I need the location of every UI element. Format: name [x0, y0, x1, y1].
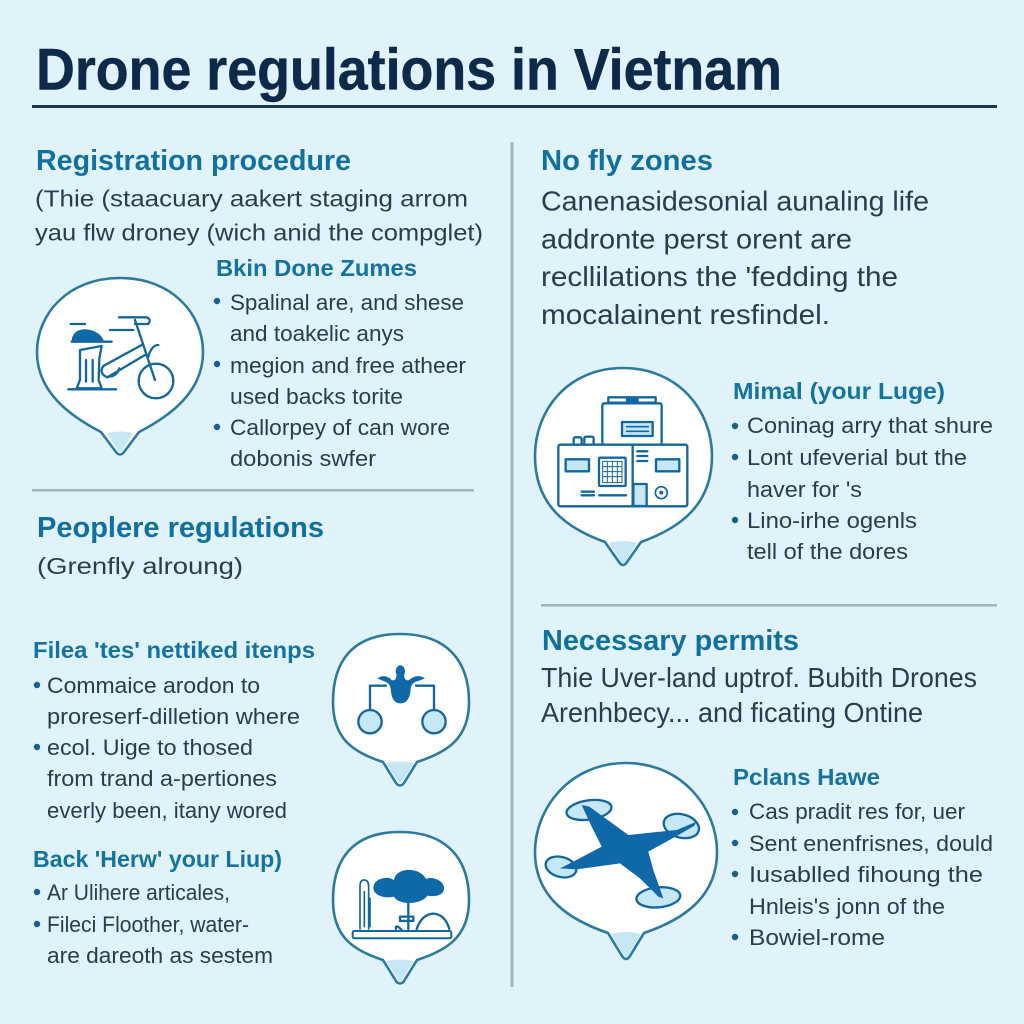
- bullet list: from trand a-pertiones: [47, 766, 277, 791]
- bullet list: megion and free atheer: [230, 353, 466, 378]
- bullet list: everly been, itany wored: [47, 798, 287, 823]
- panel: registration procedure: [35, 145, 483, 471]
- bullet list: [34, 880, 273, 968]
- intro text: recllilations the 'fedding the: [541, 261, 898, 292]
- icon: bicycle and pedestal bubble: [37, 278, 203, 454]
- bullet list: Hnleis's jonn of the: [749, 894, 945, 919]
- icon: balance figure bubble: [333, 634, 469, 786]
- bullet list: Sent enenfrisnes, dould: [749, 831, 993, 856]
- heading: no fly zones: No fly zones: [541, 145, 713, 177]
- intro text: mocalainent resfindel.: [541, 299, 830, 330]
- subheading: Pclans Hawe: Pclans Hawe: [733, 764, 880, 790]
- bullet list: proreserf-dilletion where: [47, 704, 300, 729]
- heading: registration procedure: Registration procedure: [36, 145, 351, 177]
- panel: peoplere regulations: [33, 512, 469, 984]
- bullet list: Commaice arodon to: [47, 673, 260, 698]
- icon: tree and tower bubble: [333, 832, 469, 984]
- bullet list: Lino-irhe ogenls: [747, 508, 917, 533]
- intro text: addronte perst orent are: [541, 224, 852, 254]
- bullet list: Fileci Floother, water-: [47, 912, 249, 937]
- intro text: [541, 662, 977, 728]
- bullet list: Ar Ulihere articales,: [47, 880, 230, 905]
- bullet list: used backs torite: [230, 384, 403, 409]
- intro text: Arenhbecy... and ficating Ontine: [541, 697, 923, 728]
- heading: necessary permits: Necessary permits: [542, 625, 799, 657]
- bullet list: ecol. Uige to thosed: [47, 735, 253, 760]
- intro text: Thie Uver-land uptrof. Bubith Drones: [541, 662, 977, 693]
- bullet list: and toakelic anys: [230, 321, 404, 346]
- subheading: Bkin Done Zumes: Bkin Done Zumes: [216, 255, 417, 281]
- bullet list: [214, 290, 466, 471]
- title: Drone regulations in Vietnam: [36, 38, 782, 102]
- bullet list: Bowiel-rome: [749, 925, 885, 950]
- subheading: Back Herw your Liup: Back 'Herw' your Liup): [33, 846, 282, 872]
- intro text: yau flw droney (wich anid the compglet): [35, 220, 483, 246]
- bullet list: Callorpey of can wore: [230, 415, 450, 440]
- bullet list: Iusablled fihoung the: [749, 862, 983, 887]
- bullet list: haver for 's: [747, 477, 862, 502]
- bullet list: [34, 673, 300, 823]
- intro text: (Grenfly alroung): [37, 553, 243, 579]
- bullet list: Spalinal are, and shese: [230, 290, 464, 315]
- panel: no fly zones: [535, 145, 993, 565]
- bullet list: [732, 799, 993, 950]
- heading: peoplere regulations: Peoplere regulations: [37, 512, 324, 544]
- icon: drone bubble: [535, 763, 717, 959]
- intro text: [35, 186, 483, 246]
- subheading: Filea tes nettiked itenps: Filea 'tes' nettiked itenps: [33, 637, 315, 663]
- bullet list: Cas pradit res for, uer: [749, 799, 965, 824]
- bullet list: dobonis swfer: [230, 446, 376, 471]
- icon: building bubble: [535, 368, 712, 565]
- intro text: [541, 186, 929, 330]
- bullet list: tell of the dores: [747, 539, 908, 564]
- subheading: Mimal your Luge: Mimal (your Luge): [733, 378, 945, 404]
- bullet list: are dareoth as sestem: [47, 943, 273, 968]
- bullet list: Lont ufeverial but the: [747, 445, 967, 470]
- bullet list: Coninag arry that shure: [747, 413, 993, 438]
- intro text: (Thie (staacuary aakert staging arrom: [35, 186, 468, 212]
- panel: necessary permits: [535, 625, 993, 959]
- intro text: Canenasidesonial aunaling life: [541, 186, 929, 216]
- bullet list: [732, 413, 993, 564]
